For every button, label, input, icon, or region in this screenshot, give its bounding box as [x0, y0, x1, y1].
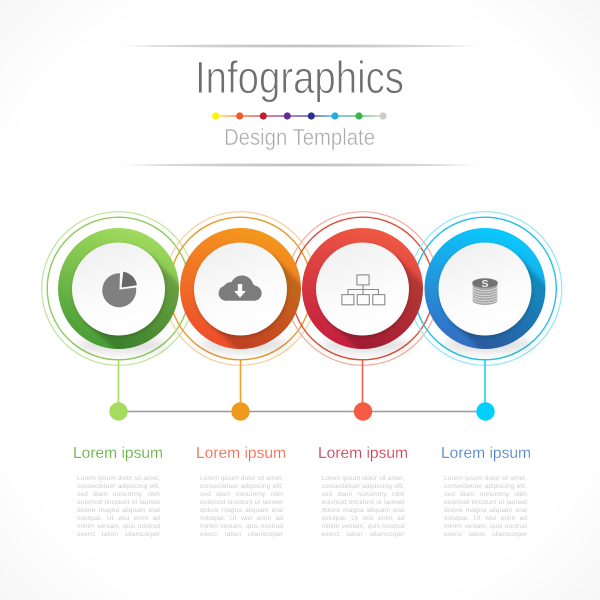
heading: step 3: Lorem ipsum: [318, 445, 408, 462]
text block: step 2: euismod tincidunt ut laoreet: [200, 499, 283, 506]
text block: step 4: euismod tincidunt ut laoreet: [444, 499, 527, 506]
text block: step 3: euismod tincidunt ut laoreet: [322, 499, 404, 506]
text block: step 3: exerci tation ullamcorper: [322, 531, 404, 538]
text block: step 2: volutpat. Ut wisi enim ad: [200, 515, 283, 522]
text block: step 2: minim veniam, quis nostrud: [200, 523, 283, 530]
text block: step 4: minim veniam, quis nostrud: [444, 523, 527, 530]
icon: pie chart: [102, 272, 137, 307]
icon: org chart: [342, 275, 385, 305]
icon: coin stack: [472, 278, 498, 305]
text block: step 2: Lorem ipsum dolor sit amet,: [200, 475, 283, 482]
text block: step 2: dolore magna aliquam erat: [200, 507, 283, 514]
text block: step 4: [444, 475, 527, 538]
text block: step 4: consectetuer adipiscing elit,: [444, 483, 527, 490]
text block: step 3: dolore magna aliquam erat: [322, 507, 404, 514]
text block: step 3: consectetuer adipiscing elit,: [322, 483, 404, 490]
step 3: red circle: [302, 228, 423, 356]
text block: step 1: [77, 475, 160, 538]
text block: step 4: Lorem ipsum dolor sit amet,: [444, 475, 527, 482]
colored dots line: [212, 112, 387, 120]
text block: step 1: dolore magna aliquam erat: [77, 507, 160, 514]
heading: step 4: Lorem ipsum: [441, 445, 531, 462]
icon: coin stack: S: [481, 278, 489, 290]
text block: step 4: volutpat. Ut wisi enim ad: [444, 515, 527, 522]
timeline nodes: [109, 402, 495, 421]
step 4: blue circle: [424, 228, 546, 356]
text block: step 1: euismod tincidunt ut laoreet: [77, 499, 160, 506]
icon: cloud download: [219, 275, 262, 301]
text block: step 2: [200, 475, 283, 538]
step 2: orange circle: [180, 228, 301, 356]
subtitle: Design Template: [224, 124, 375, 150]
text block: step 1: consectetuer adipiscing elit,: [77, 483, 160, 490]
text block: step 1: Lorem ipsum dolor sit amet,: [77, 475, 160, 482]
text block: step 3: sed diam nonummy nibh: [322, 491, 404, 498]
text block: step 3: volutpat. Ut wisi enim ad: [322, 515, 404, 522]
header panel: [80, 44, 520, 167]
text block: step 1: volutpat. Ut wisi enim ad: [77, 515, 160, 522]
text block: step 4: exerci tation ullamcorper: [444, 531, 527, 538]
text block: step 2: consectetuer adipiscing elit,: [200, 483, 283, 490]
text block: step 3: Lorem ipsum dolor sit amet,: [322, 475, 404, 482]
timeline line: [118, 411, 485, 412]
rings and stems: [42, 212, 562, 410]
text block: step 1: sed diam nonummy nibh: [77, 491, 160, 498]
heading: step 2: Lorem ipsum: [196, 445, 286, 462]
text block: step 2: sed diam nonummy nibh: [200, 491, 283, 498]
text block: step 1: exerci tation ullamcorper: [77, 531, 160, 538]
text block: step 1: minim veniam, quis nostrud: [77, 523, 160, 530]
text block: step 4: dolore magna aliquam erat: [444, 507, 527, 514]
step 1: green circle: [58, 228, 179, 356]
title: Infographics: [195, 52, 404, 103]
text block: step 3: minim veniam, quis nostrud: [322, 523, 404, 530]
text block: step 3: [322, 475, 404, 538]
text block: step 2: exerci tation ullamcorper: [200, 531, 283, 538]
heading: step 1: Lorem ipsum: [73, 445, 163, 462]
text block: step 4: sed diam nonummy nibh: [444, 491, 527, 498]
